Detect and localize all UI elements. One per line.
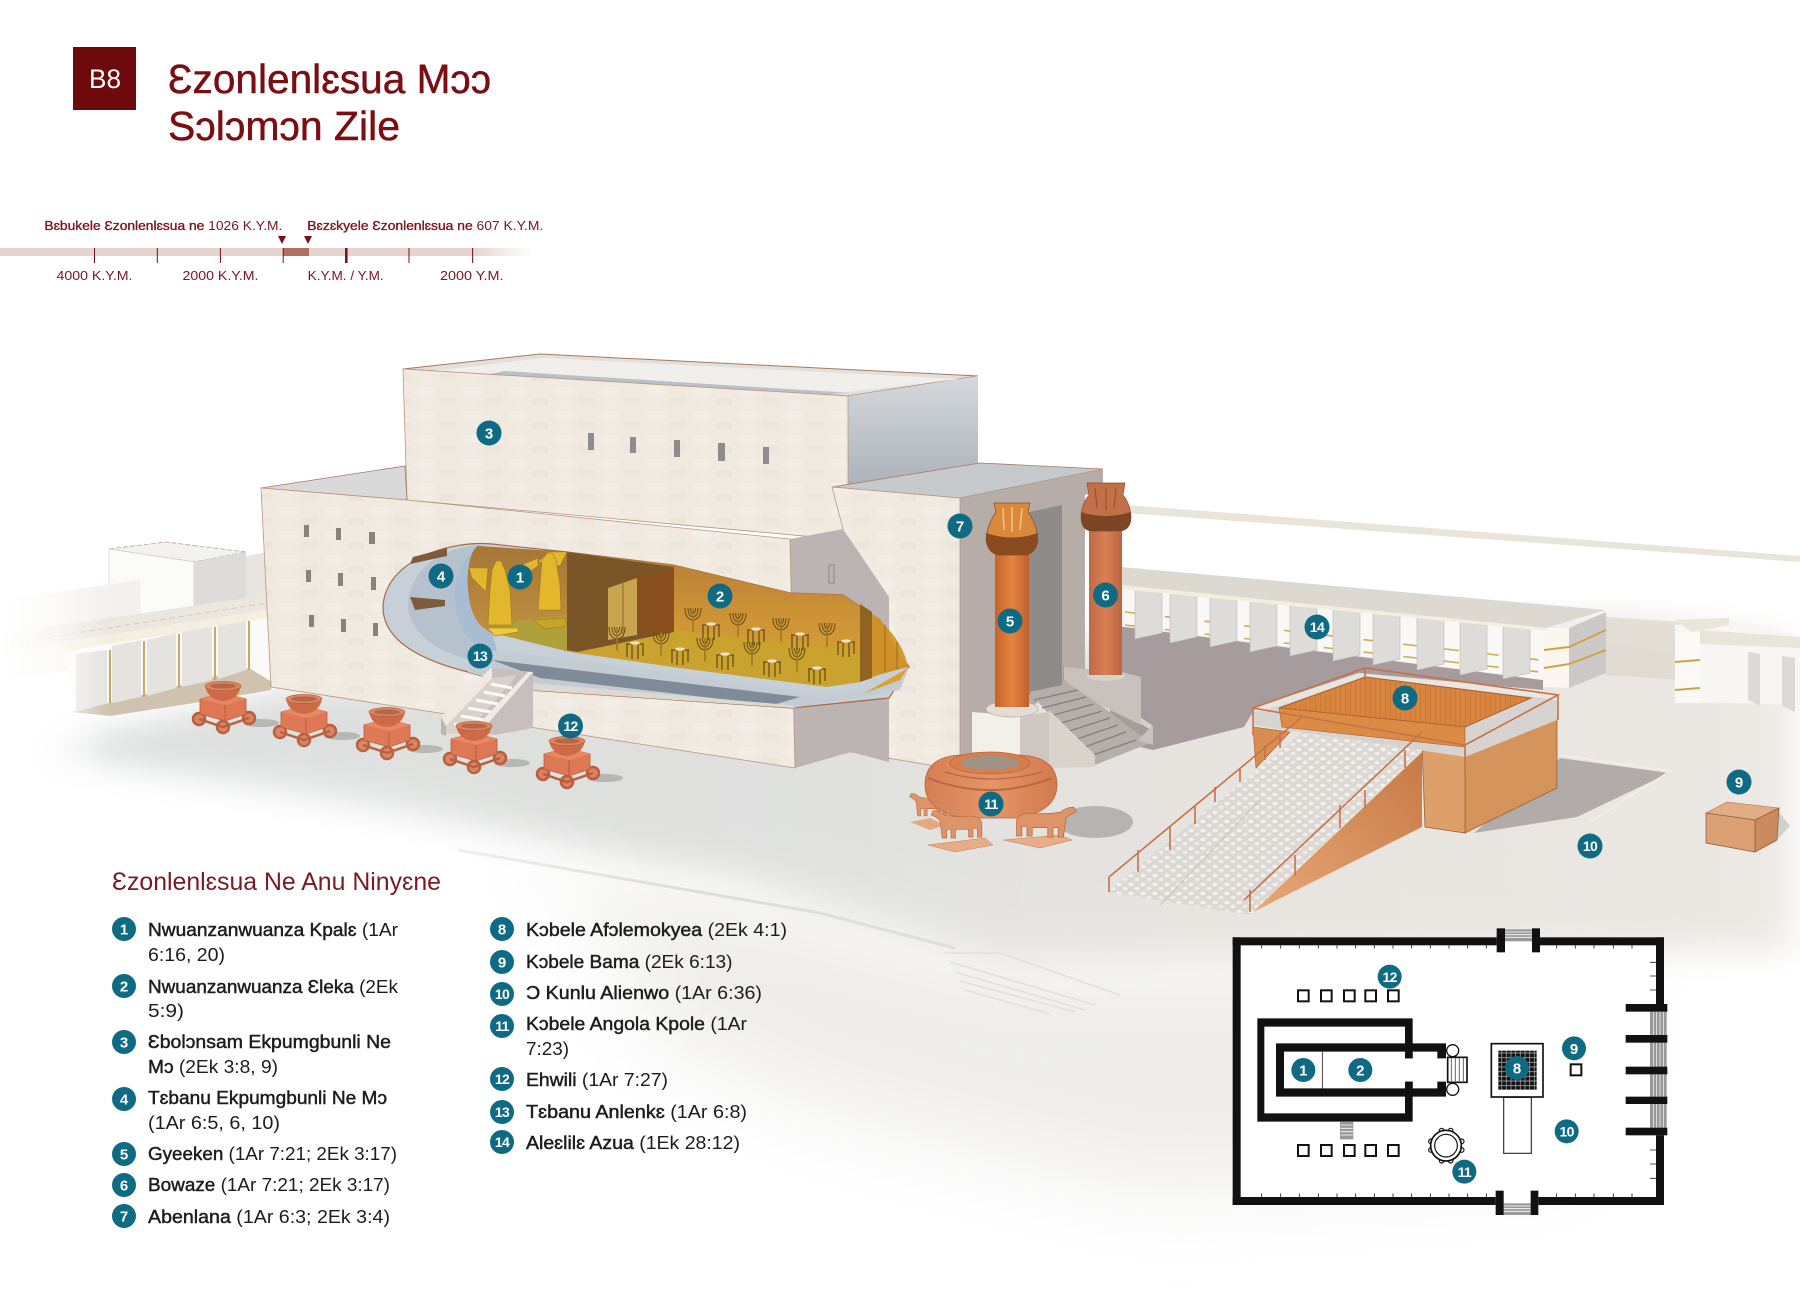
legend item 7: Abenlana (1Ar 6:3; 2Ek 3:4) <box>148 1207 390 1227</box>
altar base <box>1253 727 1290 768</box>
legend item 7: 7 <box>120 1208 128 1226</box>
plan number badges: 10 <box>1560 1124 1575 1140</box>
temple plan <box>1257 1018 1467 1139</box>
diagram number badges: 7 <box>956 518 964 536</box>
legend item 1: 6:16, 20) <box>148 945 225 965</box>
diagram number badges <box>428 420 1752 858</box>
diagram number badges: 10 <box>1583 838 1598 854</box>
panel: porch front wall <box>832 487 960 770</box>
left structures <box>0 540 272 780</box>
legend item 3 <box>112 1030 391 1077</box>
legend item 12: 12 <box>495 1071 510 1087</box>
diagram number badges: 4 <box>437 568 446 586</box>
title <box>168 56 491 149</box>
diagram number badges: 2 <box>716 588 724 606</box>
legend item 3: 3 <box>120 1034 128 1052</box>
right wall panels <box>860 604 908 682</box>
back courtyard wall top <box>1125 505 1800 562</box>
plan number badges: 9 <box>1570 1041 1578 1058</box>
floor plan <box>1233 928 1667 1215</box>
legend item 11: 7:23) <box>526 1039 569 1059</box>
diagram number badges: 9 <box>1735 774 1743 792</box>
altar shadow <box>1474 758 1669 833</box>
legend item 12: Ehwili (1Ar 7:27) <box>526 1070 668 1090</box>
legend item 1 <box>112 917 398 965</box>
panel: side chamber front wall <box>261 488 795 768</box>
legend item 14: Aleɛlilɛ Azua (1Ek 28:12) <box>526 1133 740 1153</box>
soften lower left ground <box>0 810 630 1190</box>
partition wall with doors <box>567 552 674 652</box>
legend item 11 <box>490 1014 747 1059</box>
steps to porch <box>1029 667 1153 768</box>
menorahs and tables <box>609 608 855 684</box>
cut section outer <box>383 544 909 708</box>
plan number badges: 12 <box>1383 969 1398 985</box>
legend heading: Ɛzonlenlɛsua Ne Anu Ninyɛne <box>112 868 441 896</box>
altar ledge <box>1253 677 1557 757</box>
gold interior <box>468 546 908 687</box>
diagram number badges: 6 <box>1101 588 1110 604</box>
plan number badges: 11 <box>1458 1164 1472 1180</box>
railings <box>1109 668 1558 912</box>
cherubim <box>469 552 567 636</box>
diagram number badges: 11 <box>984 796 999 812</box>
legend item 12 <box>490 1067 668 1091</box>
distant right portico <box>1606 617 1800 712</box>
diagram number badges: 13 <box>473 648 488 664</box>
legend list <box>112 917 787 1228</box>
court walls <box>1233 928 1667 1215</box>
laver squares <box>1298 990 1581 1156</box>
legend item 4: Tɛbanu Ekpumgbunli Ne Mɔ <box>148 1088 387 1108</box>
east portico <box>1121 567 1606 688</box>
legend item 3: Mɔ (2Ek 3:8, 9) <box>148 1057 278 1077</box>
side chamber right wall <box>790 529 889 768</box>
legend item 9: 9 <box>498 954 506 972</box>
panel: side chambers roof <box>261 466 407 500</box>
legend item 2: Nwuanzanwuanza Ɛleka (2Ek <box>148 977 399 997</box>
legend item 3: Ɛbolɔnsam Ekpumgbunli Ne <box>148 1032 391 1052</box>
ramp side <box>1253 752 1422 912</box>
altar grate <box>1279 677 1531 727</box>
legend item 11: 11 <box>495 1018 510 1034</box>
legend item 14 <box>490 1130 740 1154</box>
title badge B8: B8 <box>89 64 121 94</box>
diagram number badges: 5 <box>1006 614 1014 630</box>
sea plan <box>1429 1128 1464 1163</box>
most holy floor <box>490 615 570 652</box>
holy place floor <box>577 630 860 687</box>
temple building <box>261 354 1103 770</box>
upper roof <box>403 354 978 396</box>
legend item 5: Gyeeken (1Ar 7:21; 2Ek 3:17) <box>148 1144 397 1164</box>
title: Ɛzonlenlɛsua Mɔɔ <box>168 56 491 102</box>
plan number badges: 1 <box>1299 1063 1308 1080</box>
legend item 14: 14 <box>495 1134 510 1150</box>
legend item 11: Kɔbele Angola Kpole (1Ar <box>526 1014 747 1034</box>
ground courtyard <box>30 500 1800 1190</box>
legend item 2: 2 <box>120 978 128 996</box>
diagram number badges: 1 <box>516 570 524 586</box>
timeline: Bɛzɛkyele Ɛzonlenlɛsua ne 607 K.Y.M. <box>307 218 543 233</box>
timeline: 2000 K.Y.M. <box>182 268 258 283</box>
cutaway interior <box>383 544 909 708</box>
ramp surface <box>1107 733 1422 915</box>
legend item 8: Kɔbele Afɔlemokyea (2Ek 4:1) <box>526 920 787 940</box>
holy floors ledge <box>468 648 909 708</box>
diagram number badges: 8 <box>1401 690 1409 708</box>
timeline <box>0 218 543 283</box>
legend item 9 <box>490 950 732 974</box>
side chambers section <box>408 545 500 665</box>
panel: upper storey wall <box>403 369 848 540</box>
legend item 10: Ɔ Kunlu Alienwo (1Ar 6:36) <box>526 983 762 1003</box>
timeline: 2000 Y.M. <box>440 268 504 283</box>
legend item 6: 6 <box>120 1178 128 1194</box>
shadow under portico <box>1110 625 1543 750</box>
plan number badges <box>1291 965 1586 1184</box>
plan number badges: 2 <box>1356 1063 1365 1080</box>
diagram number badges: 14 <box>1310 619 1325 635</box>
legend item 6: Bowaze (1Ar 7:21; 2Ek 3:17) <box>148 1175 390 1195</box>
upper storey side <box>848 376 978 500</box>
bronze box altar 9 <box>1706 802 1790 852</box>
court gate stairs <box>1504 929 1667 1215</box>
legend item 4 <box>112 1087 387 1133</box>
timeline: Bɛbukele Ɛzonlenlɛsua ne 1026 K.Y.M. <box>44 218 282 233</box>
porch roof <box>832 463 1103 498</box>
timeline: 4000 K.Y.M. <box>56 268 132 283</box>
timeline: K.Y.M. / Y.M. <box>308 268 384 283</box>
diagram number badges: 12 <box>563 718 578 734</box>
title: Sɔlɔmɔn Zile <box>168 103 400 149</box>
pillar 5 Jachin <box>972 503 1049 770</box>
legend item 4: 4 <box>120 1092 129 1108</box>
pillar 6 Boaz <box>1064 483 1141 725</box>
most holy back wall <box>468 546 570 633</box>
legend item 1: 1 <box>120 922 128 938</box>
stairs to side chambers <box>441 667 533 736</box>
legend item 13: Tɛbanu Anlenkɛ (1Ar 6:8) <box>526 1102 747 1122</box>
outer court <box>1237 941 1660 1201</box>
legend item 4: (1Ar 6:5, 6, 10) <box>148 1113 280 1133</box>
legend item 7 <box>112 1204 390 1228</box>
altar plan <box>1491 1044 1543 1153</box>
legend item 2 <box>112 974 399 1021</box>
legend item 13: 13 <box>495 1104 510 1120</box>
lavers on stands <box>193 682 623 788</box>
legend item 9: Kɔbele Bama (2Ek 6:13) <box>526 952 732 972</box>
legend item 2: 5:9) <box>148 1001 184 1021</box>
copper altar <box>1107 668 1558 915</box>
legend item 10 <box>490 982 762 1006</box>
title badge B8 <box>73 47 136 110</box>
legend item 6 <box>112 1173 390 1197</box>
porch side wall <box>960 469 1103 770</box>
legend item 8: 8 <box>498 922 506 938</box>
diagram number badges: 3 <box>485 426 493 442</box>
legend item 10: 10 <box>495 986 510 1002</box>
legend item 5: 5 <box>120 1146 128 1164</box>
plan number badges: 8 <box>1513 1061 1521 1078</box>
molten sea basin <box>910 752 1133 852</box>
legend item 13 <box>490 1100 747 1124</box>
legend item 1: Nwuanzanwuanza Kpalɛ (1Ar <box>148 920 398 940</box>
